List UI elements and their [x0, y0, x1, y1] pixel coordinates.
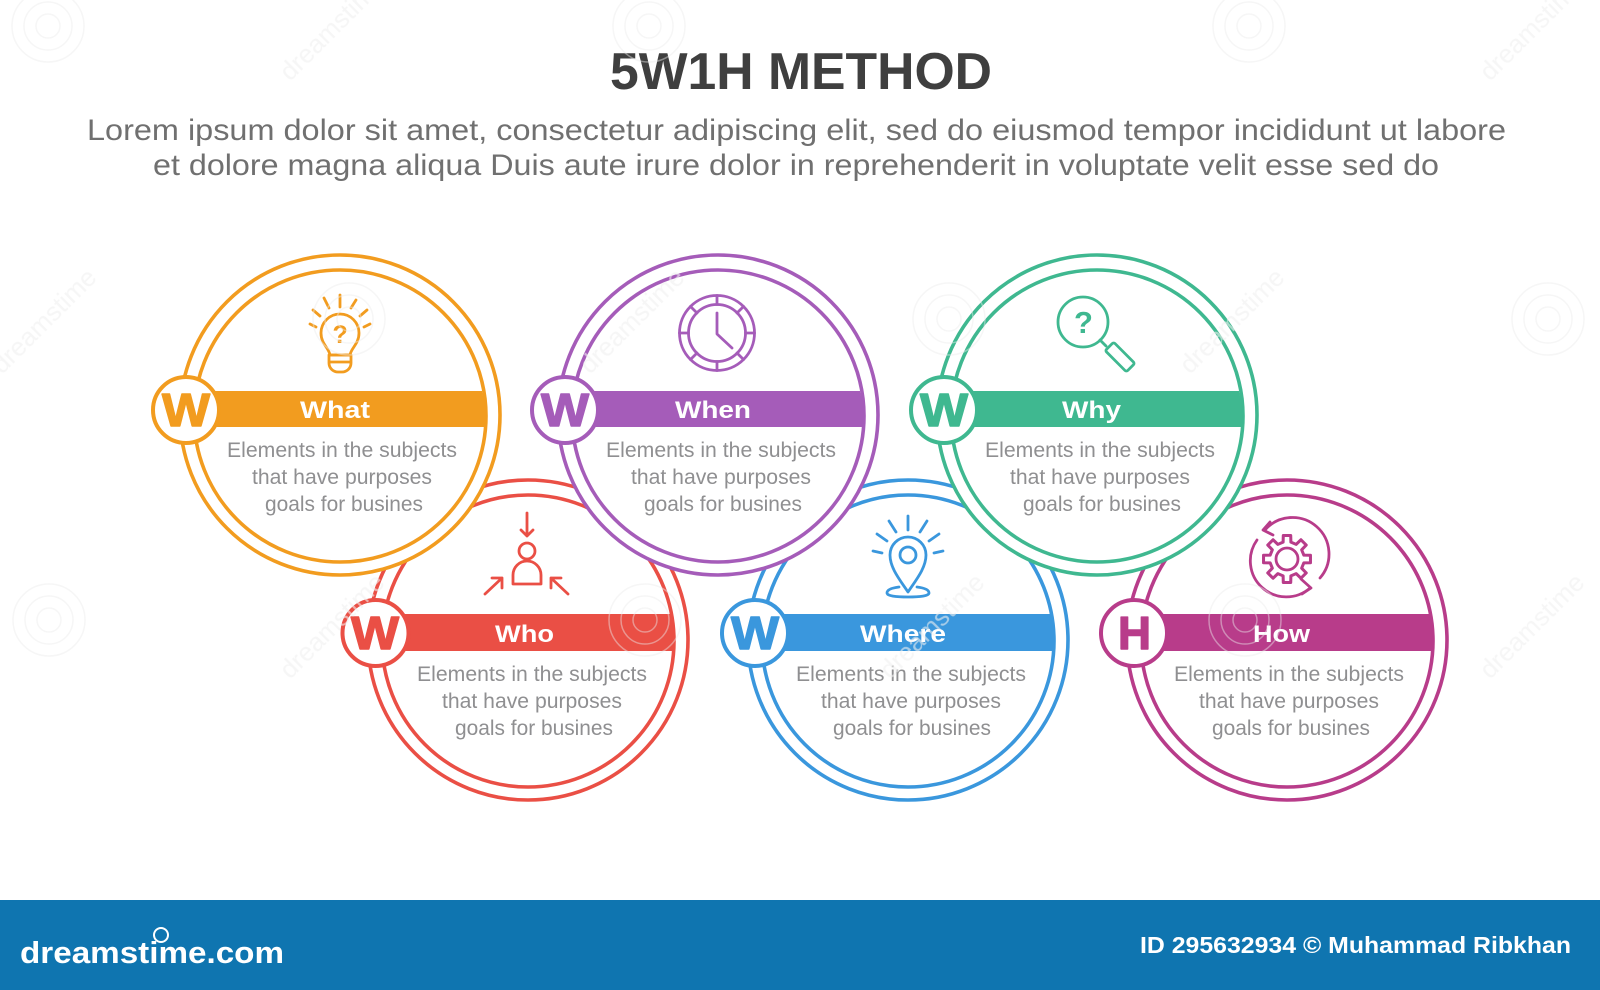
- band: how: [1132, 614, 1434, 651]
- footer bar: [0, 900, 1600, 990]
- panel: why: [911, 255, 1257, 575]
- description: who: Elements in the subjects: [417, 663, 647, 686]
- badge: how: H: [1118, 607, 1151, 659]
- panel: when: [532, 255, 878, 575]
- subtitle text: [87, 114, 1506, 182]
- band: when: [563, 391, 864, 427]
- description: who: goals for busines: [455, 717, 613, 740]
- heading: how: How: [1253, 621, 1310, 648]
- heading: why: Why: [1062, 397, 1122, 424]
- icon: person with arrows: [485, 513, 568, 594]
- badge: how: [1101, 600, 1167, 666]
- description: how: [1174, 663, 1404, 740]
- band: why: [942, 391, 1243, 427]
- icon: location pin: [873, 516, 943, 597]
- subtitle text: et dolore magna aliqua Duis aute irure dolor in reprehenderit in voluptate velit esse sed do: [153, 149, 1439, 182]
- watermark text: dreamstime: [273, 567, 390, 684]
- description: where: goals for busines: [833, 717, 991, 740]
- heading: where: Where: [860, 621, 946, 648]
- description: when: that have purposes: [631, 466, 811, 489]
- description: why: [985, 439, 1215, 516]
- icon: magnifier with question mark: ?: [1074, 305, 1093, 340]
- description: what: Elements in the subjects: [227, 439, 457, 462]
- description: how: Elements in the subjects: [1174, 663, 1404, 686]
- panel: who: [342, 480, 688, 800]
- description: why: that have purposes: [1010, 466, 1190, 489]
- description: when: [606, 439, 836, 516]
- badge: what: [153, 377, 219, 443]
- band: who: [373, 614, 675, 651]
- description: where: [796, 663, 1026, 740]
- badge: why: [911, 377, 977, 443]
- heading: when: When: [675, 397, 751, 424]
- icon: light bulb with question mark: ?: [332, 321, 348, 349]
- icon: clock: [680, 296, 754, 370]
- badge: where: W: [731, 607, 780, 659]
- badge: why: W: [920, 384, 969, 436]
- description: what: goals for busines: [265, 493, 423, 516]
- panel: where: [722, 480, 1068, 800]
- heading: who: Who: [495, 621, 554, 648]
- description: what: that have purposes: [252, 466, 432, 489]
- footer credit: ID 295632934 © Muhammad Ribkhan: [1140, 932, 1571, 958]
- watermark text: dreamstime: [1473, 567, 1590, 684]
- description: what: [227, 439, 457, 516]
- description: why: goals for busines: [1023, 493, 1181, 516]
- description: when: Elements in the subjects: [606, 439, 836, 462]
- band: what: [185, 391, 486, 427]
- description: who: that have purposes: [442, 690, 622, 713]
- badge: who: W: [351, 607, 400, 659]
- description: where: that have purposes: [821, 690, 1001, 713]
- description: who: [417, 663, 647, 740]
- description: how: that have purposes: [1199, 690, 1379, 713]
- badge: who: [342, 600, 408, 666]
- watermark text: [0, 0, 1590, 684]
- heading: what: What: [300, 397, 370, 424]
- badge: when: [532, 377, 598, 443]
- subtitle text: Lorem ipsum dolor sit amet, consectetur adipiscing elit, sed do eiusmod tempor incididunt ut labore: [87, 114, 1506, 147]
- badge: where: [722, 600, 788, 666]
- icon: light bulb with question mark: [310, 295, 370, 372]
- description: when: goals for busines: [644, 493, 802, 516]
- description: why: Elements in the subjects: [985, 439, 1215, 462]
- title: 5W1H METHOD: [610, 43, 992, 101]
- panel: what: [153, 255, 500, 575]
- description: where: Elements in the subjects: [796, 663, 1026, 686]
- description: how: goals for busines: [1212, 717, 1370, 740]
- watermark text: dreamstime: [573, 262, 690, 379]
- watermark text: dreamstime: [1173, 262, 1290, 379]
- icon: magnifier with question mark: [1058, 297, 1135, 372]
- badge: when: W: [541, 384, 590, 436]
- footer logo: dreamstime.com: [20, 935, 284, 970]
- panel: how: [1101, 480, 1447, 800]
- watermark text: dreamstime: [873, 567, 990, 684]
- band: where: [753, 614, 1055, 651]
- icon: gear with cycle arrows: [1250, 518, 1329, 597]
- badge: what: W: [162, 384, 211, 436]
- watermark spirals: [12, 0, 1584, 656]
